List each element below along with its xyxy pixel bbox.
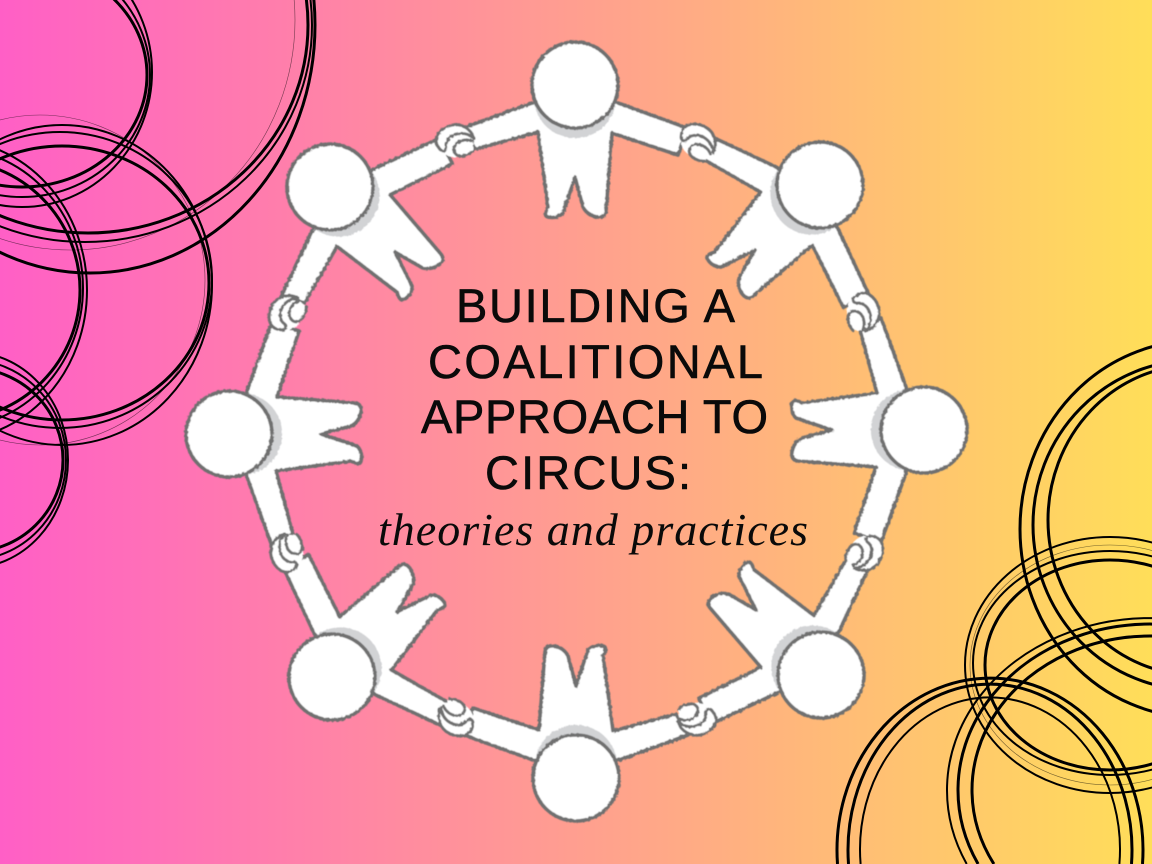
clasped hands: lower right <box>843 529 888 576</box>
person: right <box>792 318 967 542</box>
title: BUILDING A <box>456 279 736 332</box>
title: COALITIONAL <box>428 335 763 388</box>
clasped hands: top left <box>432 119 479 164</box>
title: APPROACH TO <box>421 390 768 443</box>
clasped hands: bottom right <box>673 696 720 741</box>
scribbled circles: bottom right <box>837 341 1152 864</box>
clasped hands: lower left <box>265 529 310 576</box>
person: bottom <box>464 646 688 821</box>
person: top right <box>647 75 930 358</box>
person: bottom left <box>222 504 505 787</box>
clasped hands: bottom left <box>433 696 480 741</box>
clasped hands: upper left <box>264 290 309 337</box>
title <box>421 279 768 499</box>
title: CIRCUS: <box>485 446 691 499</box>
subtitle: theories and practices <box>378 504 808 555</box>
ring of eight people holding hands <box>186 42 967 821</box>
person: top <box>463 42 687 218</box>
person: top left <box>220 77 503 360</box>
scribbled circles: top left <box>0 0 315 568</box>
person: bottom right <box>648 502 931 785</box>
person: left <box>186 322 362 546</box>
clasped hands: upper right <box>840 289 885 336</box>
clasped hands: top right <box>674 119 721 164</box>
